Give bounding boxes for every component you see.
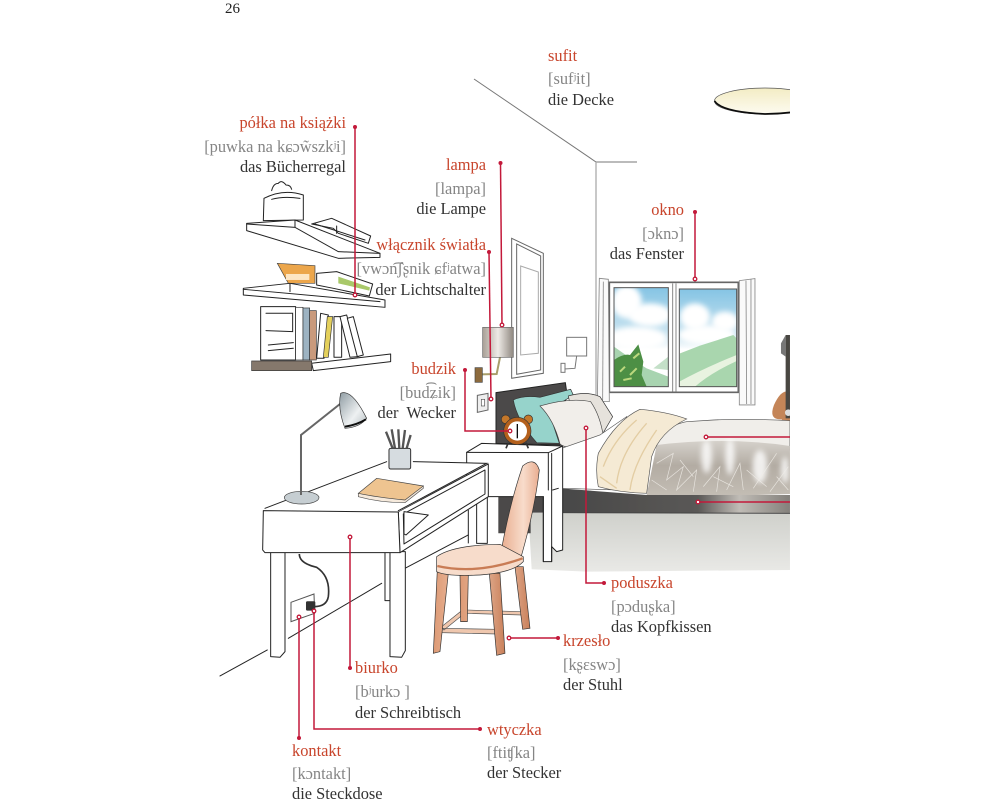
stacked books [317,272,373,296]
leader line: budzik [463,368,512,433]
label: włącznik światła: [vwɔn͡ʃʂnik ɕfʲatwa] [356,259,486,278]
chair front legs [433,570,505,655]
label: włącznik światła: włącznik światła [376,235,487,254]
room illustration [220,79,816,676]
label: wtyczka: [ftiʧka] [487,743,536,762]
jar on top shelf [263,192,303,221]
leader line: biurko [348,535,352,670]
label: poduszka: das Kopfkissen [611,617,712,636]
middle shelf [243,283,385,307]
rug [528,513,790,572]
desk front [263,511,400,553]
label: okno [610,200,685,263]
label: wtyczka [487,720,562,782]
top shelf [247,220,380,258]
leader line: wtyczka [312,609,482,731]
duvet side [647,441,790,496]
back pillow [568,393,613,433]
page number: 26 [225,1,240,17]
sheet [562,417,627,490]
label: włącznik światła [356,235,487,299]
orange book [277,263,315,283]
right leg [390,552,405,657]
label: wtyczka: der Stecker [487,763,562,782]
power socket [291,594,315,622]
label: kontakt: [kɔntakt] [292,764,351,783]
ceiling and wall lines [474,79,637,395]
back leg [385,550,391,601]
bookshelves [243,182,391,371]
right pane [678,289,738,387]
nightstand [467,443,563,562]
bed frame [560,488,790,513]
icon: guitar [772,335,790,420]
label: sufit: [sufʲit] [548,69,591,88]
label: włącznik światła: der Lichtschalter [375,280,487,299]
chair [433,462,539,655]
wall lamp with sconce [475,327,513,382]
label: półka na książki: półka na książki [239,113,346,132]
label: półka na książki [204,113,346,176]
label: kontakt: kontakt [292,741,342,760]
duvet highlights [701,438,789,483]
bed [496,383,790,572]
leader line: duvet [704,435,790,439]
label: poduszka [611,573,712,636]
desk side [398,464,488,553]
book on desk [358,478,423,503]
label: poduszka: [pɔduʂka] [611,597,676,616]
desk [220,393,488,676]
icon: ceiling lamp [714,88,816,114]
label: lampa: [lampa] [435,179,486,198]
top shelf books [312,218,371,243]
leader line: poduszka [584,426,606,585]
magazine [404,512,428,535]
label: lampa [416,155,487,218]
curtains [597,278,755,405]
teal pillow [513,389,573,443]
label: sufit [548,46,614,109]
desk lamp [284,393,367,504]
headboard [496,383,567,445]
plug [306,601,315,611]
label: biurko: biurko [355,658,398,677]
label: sufit: sufit [548,46,578,65]
label: budzik [378,359,457,422]
duvet top [657,419,790,450]
label: krzesło [563,631,623,694]
leader line: okno [693,210,697,281]
label: półka na książki: das Bücherregal [240,157,346,176]
label: biurko [355,658,461,722]
front pillow [540,400,603,448]
duvet fold [597,409,687,493]
left leg [271,552,285,657]
cable [299,554,329,607]
label: okno: das Fenster [610,244,685,263]
leader line: włącznik [487,250,493,401]
label: poduszka: poduszka [611,573,674,592]
window [607,282,738,392]
icon: light switch [477,393,488,412]
label: krzesło: der Stuhl [563,675,623,694]
duvet texture [652,453,788,492]
second wall lamp [561,337,587,372]
bottom shelf [312,354,391,371]
label: okno: okno [651,200,684,219]
wall picture [512,238,543,378]
label: biurko: der Schreibtisch [355,703,461,722]
label: kontakt [292,741,383,800]
label: okno: [ɔknɔ] [642,224,684,243]
label: lampa: die Lampe [416,199,486,218]
label: półka na książki: [puwka na kɕɔw̃szkʲi] [204,137,346,156]
label: krzesło: krzesło [563,631,610,650]
label: budzik: der Wecker [378,403,457,422]
chair seat [437,544,523,575]
leader line: kontakt [297,615,301,740]
leader line: lampa [498,161,504,327]
label: biurko: [bʲurkɔ ] [355,682,410,701]
leader line: półka [353,125,357,297]
chair rungs [441,609,522,634]
fold texture [600,420,657,490]
pencil cup [386,429,411,469]
left pane [614,288,668,386]
label: budzik: [bud͡ʑik] [400,382,456,402]
upright books [261,307,296,360]
label: lampa: lampa [446,155,487,174]
chair back legs [460,567,530,629]
label: krzesło: [kʂɛswɔ] [563,655,621,674]
leader line: bed [696,500,790,504]
leader line: krzesło [507,636,560,640]
desk top surface [265,462,487,512]
label: wtyczka: wtyczka [487,720,542,739]
icon: alarm clock [501,415,533,448]
label: sufit: die Decke [548,90,614,109]
wall baseline [220,535,468,676]
chair backrest [499,462,539,562]
label: budzik: budzik [411,359,457,378]
